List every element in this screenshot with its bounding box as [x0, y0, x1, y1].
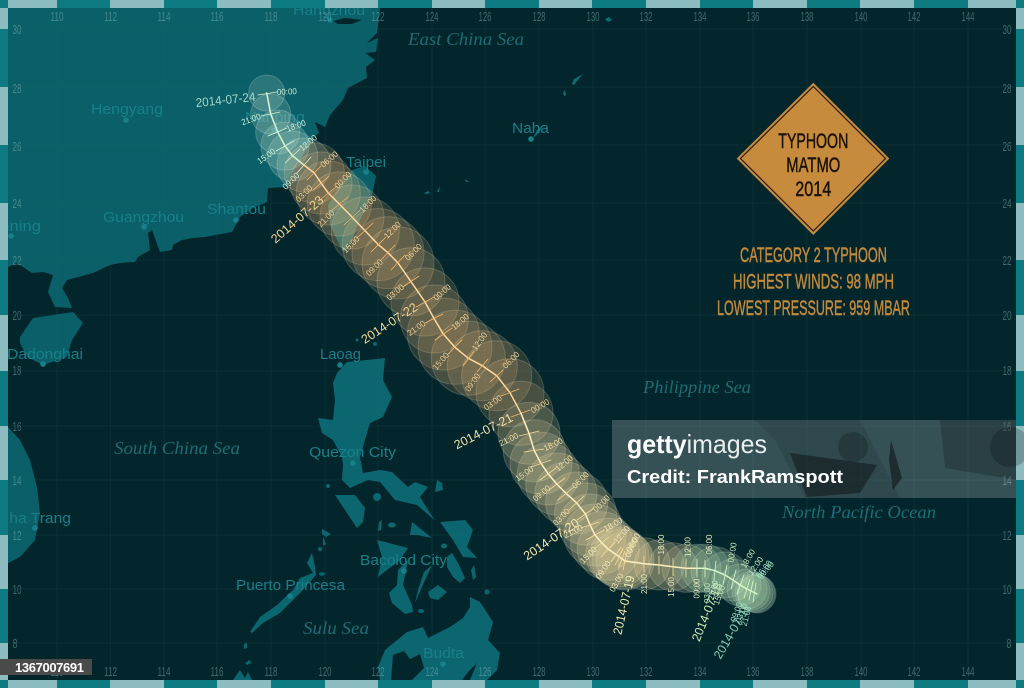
labels: 23 July: 18:00	[357, 193, 379, 214]
axis labels: longitude and latitude: 132	[640, 9, 652, 24]
axis labels: longitude and latitude: 128	[532, 9, 546, 24]
axis labels: longitude and latitude: 136	[746, 664, 760, 679]
storm statistics text: HIGHEST WINDS: 98 MPH	[733, 270, 894, 294]
labels: 18 July: 21:00	[706, 579, 721, 601]
labels: 21 July: 12:00	[553, 453, 575, 473]
axis labels: longitude and latitude: 24	[1002, 196, 1012, 211]
axis labels: longitude and latitude: 8	[12, 636, 18, 651]
labels: 20 July: 21:00	[562, 522, 585, 540]
labels: 19 July	[611, 534, 714, 636]
sign title	[778, 130, 848, 201]
diamond sign shape	[737, 83, 889, 235]
axis labels: longitude and latitude: 122	[372, 9, 384, 24]
labels: 22 July: 2014-07-22	[359, 300, 420, 347]
labels: 23 July: 03:00	[293, 183, 315, 204]
labels: 19 July: 2014-07-19	[611, 574, 638, 636]
axis labels: longitude and latitude: 20	[12, 308, 22, 323]
labels: 22 July: 18:00	[449, 311, 471, 332]
axis labels: longitude and latitude: 118	[264, 664, 278, 679]
city: Dadonghai: Dadonghai	[7, 346, 83, 363]
labels: 21 July: 15:00	[513, 464, 536, 483]
axis labels: longitude and latitude: 126	[478, 9, 492, 24]
axis labels: longitude and latitude: 134	[694, 9, 706, 24]
axis labels: longitude and latitude: 28	[12, 81, 22, 96]
axis labels: longitude and latitude: 130	[586, 9, 600, 24]
labels: 23 July: 09:00	[364, 257, 385, 278]
chart: track line with time ticks	[258, 92, 757, 602]
map: land masses	[8, 8, 612, 680]
labels: 21 July: 09:00	[531, 483, 553, 503]
circles: 24 July end, pale green	[249, 75, 331, 192]
axis labels: longitude and latitude: 122	[372, 664, 384, 679]
axis labels: longitude and latitude: 114	[158, 9, 170, 24]
labels: 19 July: 21:00	[639, 574, 649, 594]
axis labels: longitude and latitude: 112	[104, 664, 117, 679]
axis labels: longitude and latitude: 22	[1002, 253, 1012, 268]
land: Taiwan	[328, 166, 376, 252]
axis labels: longitude and latitude: 18	[1002, 363, 1012, 378]
sea: South China Sea: South China Sea	[114, 438, 240, 458]
axis labels: longitude and latitude: 14	[1002, 473, 1012, 488]
image id tag: 1367007691	[15, 660, 84, 675]
labels: 19 July: 12:00	[682, 537, 692, 557]
labels: 19 July: 15:00	[666, 577, 676, 597]
axis labels: longitude and latitude: 120	[318, 9, 332, 24]
labels: 21 July: 18:00	[542, 435, 565, 453]
labels: 20 July: 03:00	[607, 571, 626, 594]
watermark background with abstract shapes	[612, 420, 1024, 498]
axis labels: longitude and latitude: 114	[158, 664, 170, 679]
axis labels: longitude and latitude: 130	[586, 664, 600, 679]
city: Puerto Princesa: Puerto Princesa	[236, 577, 346, 594]
city: Taipei: Taipei	[346, 154, 386, 171]
labels: 24 July: 00:00	[277, 86, 297, 97]
axis labels: longitude and latitude: 144	[962, 664, 974, 679]
axis labels: longitude and latitude: 120	[318, 664, 332, 679]
land: Luzon	[318, 358, 435, 520]
labels: 18 July: 03:00	[702, 583, 712, 603]
labels: 22 July: 00:00	[529, 396, 551, 415]
city: Hangzhou: Hangzhou	[293, 2, 365, 19]
circles: 21 to 23 July, orange	[284, 143, 553, 445]
city: Nanping	[245, 109, 305, 133]
sea: East China Sea: East China Sea	[407, 29, 524, 49]
axis labels: longitude and latitude: 28	[1002, 81, 1012, 96]
title sign: diamond	[737, 83, 889, 235]
labels: 20 July: 12:00	[611, 524, 632, 545]
sign title: 2014	[795, 178, 832, 201]
labels: 17 July	[711, 558, 776, 661]
labels: 24 July: 2014-07-24	[195, 90, 256, 110]
track: 17 to 18 July start	[697, 559, 757, 602]
city: Guangzhou: Guangzhou	[103, 209, 184, 226]
labels: 21 July: 21:00	[498, 430, 520, 448]
land: Moro Gulf	[391, 651, 424, 680]
getty images logo: gettyimages	[627, 429, 767, 459]
sign title: MATMO	[786, 154, 840, 177]
city: Naha: Naha	[512, 120, 550, 137]
city: Shantou: Shantou	[207, 201, 266, 218]
city: Hengyang: Hengyang	[91, 101, 163, 118]
labels: 21 July: 06:00	[570, 469, 591, 490]
axis labels: longitude and latitude: 140	[854, 9, 868, 24]
axis labels: longitude and latitude: 16	[12, 419, 22, 434]
labels: 19 July: 18:00	[656, 534, 666, 554]
chart: track time and date labels	[195, 86, 776, 661]
sign title: TYPHOON	[778, 130, 848, 153]
axis labels: longitude and latitude: 132	[640, 664, 652, 679]
axis labels: longitude and latitude: 128	[532, 664, 546, 679]
storm statistics text: CATEGORY 2 TYPHOON	[740, 244, 887, 267]
axis labels: longitude and latitude: 110	[50, 9, 64, 24]
labels: 21 July: 00:00	[591, 493, 612, 514]
labels: 18 July: 15:00	[711, 584, 727, 606]
track: 21 to 23 July	[304, 165, 530, 417]
city: Budta: Budta	[423, 645, 465, 662]
labels: 20 July	[521, 515, 642, 594]
axis labels: longitude and latitude: 134	[694, 664, 706, 679]
labels: 23 July: 12:00	[382, 219, 403, 240]
labels: 24 July: 12:00	[297, 132, 319, 153]
land: Hangzhou bay inlet	[333, 18, 362, 24]
labels: 20 July: 09:00	[593, 559, 613, 581]
labels: 17 July: 2014-07-17	[711, 601, 754, 661]
labels: 21 July: 2014-07-21	[452, 411, 515, 452]
city labels and dots	[0, 2, 550, 667]
axis labels: longitude and latitude: 138	[800, 9, 814, 24]
labels: 21 July	[452, 411, 612, 527]
labels: 17 July: 00:00	[755, 559, 776, 581]
land: Mindanao	[378, 597, 500, 680]
axis labels: longitude and latitude: 124	[426, 9, 438, 24]
labels: 17 July: 03:00	[733, 602, 749, 624]
labels: 22 July: 15:00	[430, 350, 451, 372]
land: Hainan	[20, 312, 83, 365]
axis labels: longitude and latitude: 30	[1002, 22, 1012, 37]
labels: 20 July: 18:00	[602, 515, 624, 534]
labels: 23 July: 00:00	[431, 282, 453, 302]
labels: 24 July: 21:00	[240, 111, 262, 127]
axis labels: longitude and latitude: 12	[1002, 528, 1012, 543]
labels: 19 July: 06:00	[704, 534, 714, 554]
labels: 24 July: 15:00	[255, 146, 278, 166]
labels: 17 July: 09:00	[728, 601, 744, 623]
axis labels: longitude and latitude: 138	[800, 664, 814, 679]
city: Quezon City: Quezon City	[309, 444, 397, 461]
land: Palawan	[250, 553, 316, 633]
axis labels: longitude and latitude: 30	[12, 22, 22, 37]
labels: 20 July: 06:00	[624, 531, 642, 554]
axis labels: longitude and latitude: 26	[1002, 139, 1012, 154]
land: Philippine islands	[318, 338, 490, 614]
axis labels: longitude and latitude: 20	[1002, 308, 1012, 323]
labels: 24 July	[195, 86, 319, 191]
axis labels: longitude and latitude: 136	[746, 9, 760, 24]
axis labels: longitude and latitude: 16	[1002, 419, 1012, 434]
labels: 23 July: 00:00	[332, 169, 354, 190]
axis labels: longitude and latitude: 116	[210, 9, 224, 24]
labels: 17 July: 21:00	[739, 605, 754, 627]
watermark panel	[612, 420, 1024, 498]
axis labels: longitude and latitude: 12	[12, 528, 22, 543]
sea: North Pacific Ocean: North Pacific Ocean	[781, 502, 936, 522]
axis labels: longitude and latitude: 24	[12, 196, 22, 211]
labels: 21 July: 03:00	[551, 506, 572, 527]
city: Nanping: Nanping	[245, 109, 305, 126]
axis labels: longitude and latitude: 140	[854, 664, 868, 679]
credit line: Credit: FrankRamspott	[627, 467, 843, 487]
storm statistics text	[717, 244, 910, 320]
labels: 22 July: 03:00	[482, 393, 504, 412]
labels: 22 July	[359, 300, 551, 415]
labels: 20 July: 2014-07-20	[521, 516, 582, 563]
axis labels: longitude and latitude: 144	[962, 9, 974, 24]
labels: 22 July: 12:00	[470, 330, 490, 352]
axis labels: longitude and latitude: 110	[50, 664, 64, 679]
labels: 23 July: 03:00	[384, 282, 406, 302]
labels: 23 July: 15:00	[340, 234, 362, 255]
labels: 18 July: 00:00	[725, 542, 739, 563]
labels: 18 July	[689, 542, 766, 643]
axis labels: longitude and latitude: 8	[1006, 636, 1012, 651]
labels: 24 July: 09:00	[280, 170, 302, 191]
axis labels: longitude and latitude: 126	[478, 664, 492, 679]
land: China mainland	[8, 8, 380, 308]
city: Nha Trang: Nha Trang	[0, 510, 71, 527]
labels: 18 July: 2014-07-18	[689, 581, 725, 643]
axis labels: longitude and latitude: 124	[426, 664, 438, 679]
labels: 23 July: 06:00	[318, 149, 340, 169]
labels: 19 July: 09:00	[692, 578, 702, 598]
axis labels: longitude and latitude: 18	[12, 363, 22, 378]
labels: 23 July	[268, 149, 453, 302]
labels: 22 July: 21:00	[405, 318, 428, 338]
labels: 22 July: 09:00	[463, 371, 483, 393]
axis labels: longitude and latitude: 14	[12, 473, 22, 488]
axis labels: longitude and latitude: 142	[908, 664, 920, 679]
axis labels: longitude and latitude: 10	[1002, 582, 1012, 597]
labels: 17 July: 06:00	[753, 558, 774, 580]
labels: 23 July: 2014-07-23	[268, 193, 327, 246]
labels: 18 July: 12:00	[746, 555, 766, 577]
circles: 17 to 18 July start, green	[673, 544, 776, 613]
axis labels: longitude and latitude: 26	[12, 139, 22, 154]
land: Ryukyu islands	[424, 17, 612, 194]
axis labels: longitude and latitude: 142	[908, 9, 920, 24]
labels: 23 July: 21:00	[315, 208, 337, 229]
land: Vietnam coast	[8, 427, 40, 563]
labels: 23 July: 06:00	[403, 241, 424, 262]
labels: 20 July: 15:00	[578, 544, 599, 565]
axis labels: longitude and latitude: 10	[12, 582, 22, 597]
track: 24 July end	[258, 92, 311, 173]
city: Bacolod City: Bacolod City	[360, 552, 448, 569]
axis labels: longitude and latitude: 118	[264, 9, 278, 24]
axis labels: longitude and latitude: 116	[210, 664, 224, 679]
sea: Philippine Sea: Philippine Sea	[642, 377, 751, 397]
sea labels	[114, 29, 936, 638]
labels: 22 July: 06:00	[500, 349, 522, 370]
axis labels: longitude and latitude: 112	[104, 9, 117, 24]
labels: 18 July: 18:00	[739, 547, 757, 570]
city: Nanning	[0, 218, 41, 239]
track: 19 to 21 July	[519, 413, 697, 577]
labels: 20 July: 00:00	[623, 536, 640, 559]
chart: storm wind-radius circles along the track	[249, 75, 776, 613]
axis labels: longitude and latitude: 22	[12, 253, 22, 268]
land: Borneo tip and islets	[233, 643, 252, 680]
city: Laoag: Laoag	[320, 346, 361, 363]
sea: Sulu Sea: Sulu Sea	[303, 618, 369, 638]
circles: 19 to 21 July, cream	[498, 402, 710, 592]
labels: 24 July: 18:00	[285, 117, 307, 134]
